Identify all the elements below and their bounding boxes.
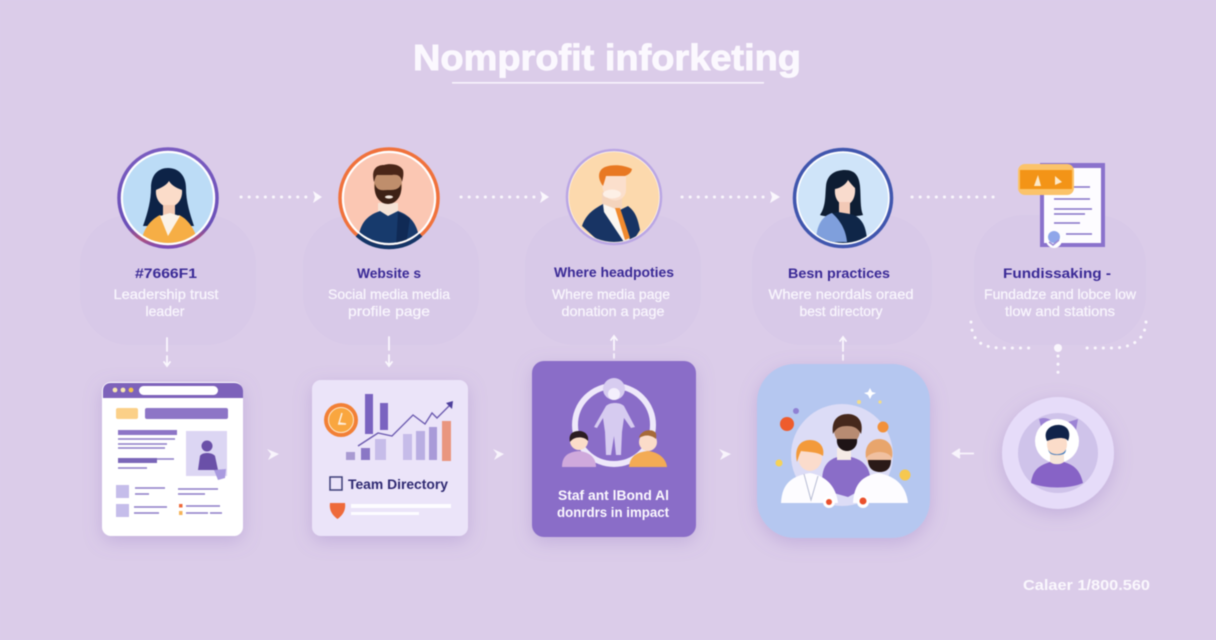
step 5: fundraising: tlow and stations <box>1005 303 1115 319</box>
description 1: Leadership trust <box>114 286 219 302</box>
text panel 4 <box>752 215 932 345</box>
icon: circle of people <box>562 378 667 467</box>
heading 5: Fundissaking - <box>1003 265 1111 281</box>
card: staff and board <box>532 361 696 537</box>
description 3: Where media page <box>552 286 670 302</box>
description 5: Fundadze and lobce low <box>984 286 1137 302</box>
step 3: where headpoties <box>552 148 674 320</box>
floating badges <box>780 417 794 431</box>
text panel 2 <box>303 215 479 345</box>
card caption: donrdrs in impact <box>557 504 669 520</box>
step 2: website <box>328 146 450 320</box>
center person <box>822 414 870 497</box>
circular avatar: person in purple <box>1002 397 1114 509</box>
text panel 1 <box>80 215 256 345</box>
left arrow <box>953 449 974 458</box>
checkbox icon <box>330 477 342 490</box>
step 2: website: profile page <box>348 303 430 319</box>
text panel 5 <box>974 215 1146 345</box>
title underline <box>452 82 764 84</box>
vertical arrows between rows <box>164 336 846 366</box>
card: website browser mockup <box>102 382 243 536</box>
card: team directory chart <box>312 380 468 536</box>
icon: document with orange banner <box>1018 163 1105 248</box>
right person <box>853 439 908 503</box>
avatar: woman in orange <box>119 149 217 247</box>
title: Nomprofit inforketing <box>413 37 801 78</box>
description 4: Where neordals oraed <box>768 286 914 302</box>
footer note: Calaer 1/800.560 <box>1023 577 1150 594</box>
step 5: fundraising <box>974 163 1146 345</box>
small arrow <box>719 449 731 460</box>
left person <box>781 440 838 503</box>
avatar: woman in blue <box>794 150 892 248</box>
small arrow <box>493 449 504 460</box>
description 2: Social media media <box>328 286 450 302</box>
card caption: Staf ant lBond Al <box>558 487 669 503</box>
dotted arrows between steps <box>241 197 1146 380</box>
avatar: man in suit <box>566 150 662 246</box>
small arrow <box>267 449 279 460</box>
heading 4: Besn practices <box>788 265 890 281</box>
icon: shield <box>330 503 345 519</box>
card caption <box>557 487 669 520</box>
text panel 3 <box>525 215 701 345</box>
step 1: leadership <box>114 146 220 316</box>
arrowheads on top row <box>313 191 1062 352</box>
step 1: leadership: leader <box>146 303 185 319</box>
heading 1: #7666F1 <box>135 265 197 281</box>
heading 3: Where headpoties <box>554 264 674 280</box>
icon: orange coin <box>324 403 358 437</box>
step 4: best practices: best directory <box>800 303 882 319</box>
heading 2: Website s <box>357 265 421 281</box>
avatar: bearded man <box>340 149 438 247</box>
bar chart <box>346 394 453 461</box>
label: team directory: Team Directory <box>348 476 448 492</box>
card: team illustration <box>757 364 930 538</box>
step 4: best practices <box>768 147 913 320</box>
step 3: where headpoties: donation a page <box>562 303 665 319</box>
